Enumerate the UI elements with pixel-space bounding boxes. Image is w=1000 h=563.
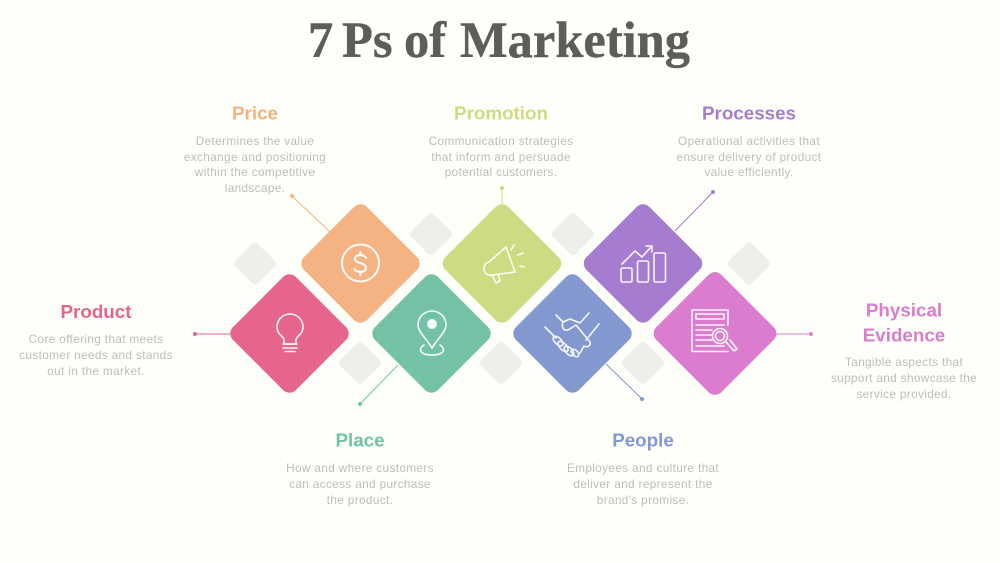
text: product: customer needs and stands <box>19 348 173 362</box>
heading: place: Place <box>335 430 385 450</box>
diamond: place <box>369 271 494 396</box>
connector: product <box>193 332 232 336</box>
decorative gray diamonds <box>232 211 772 386</box>
text: processes: value efficiently. <box>704 165 794 179</box>
diamond: product <box>227 271 352 396</box>
text: price: Determines the value <box>196 134 314 148</box>
icon: growth chart <box>621 246 666 282</box>
panel: place <box>286 271 494 507</box>
text: people: deliver and represent the <box>573 477 713 491</box>
heading: product: Product <box>61 301 132 322</box>
text: people: Employees and culture that <box>567 461 719 475</box>
panel: promotion <box>429 102 573 326</box>
connector: physical evidence <box>774 332 813 336</box>
text: physical evidence: support and showcase the <box>831 371 977 385</box>
title: Marketing <box>460 12 690 68</box>
icon: document with magnifier <box>692 310 737 352</box>
connector: processes <box>675 190 715 231</box>
text: physical evidence: service provided. <box>856 387 952 401</box>
diamond: promotion <box>439 201 565 326</box>
connector: place <box>358 365 398 406</box>
text: product: Core offering that meets <box>29 332 163 346</box>
panel: product <box>19 271 352 396</box>
panel: physical evidence <box>650 268 977 401</box>
text: price: landscape. <box>225 181 285 195</box>
title: of <box>404 12 459 68</box>
text: physical evidence: Tangible aspects that <box>845 355 963 369</box>
diamond: people <box>510 271 635 396</box>
text: processes: ensure delivery of product <box>677 150 822 164</box>
heading: price: Price <box>232 102 278 124</box>
diamond: processes <box>580 201 706 326</box>
text: promotion: potential customers. <box>445 165 557 179</box>
text: place: can access and purchase <box>289 477 431 491</box>
text: price: exchange and positioning <box>184 150 326 164</box>
icon: map pin <box>418 311 446 355</box>
connector: promotion <box>500 186 504 206</box>
panel: people <box>510 271 719 507</box>
diamond: price <box>298 201 423 326</box>
text: promotion: Communication strategies <box>429 134 573 148</box>
text: price: within the competitive <box>194 165 315 179</box>
icon: megaphone <box>484 245 524 283</box>
panel: processes <box>580 102 822 326</box>
text: product: out in the market. <box>47 364 145 378</box>
icon: light bulb <box>277 314 303 352</box>
text: promotion: that inform and persuade <box>431 150 571 164</box>
diamond: physical evidence <box>650 268 780 399</box>
panel: price <box>184 102 423 326</box>
connector: price <box>290 194 330 232</box>
icon: dollar coin <box>342 244 379 282</box>
heading: physical evidence: Physical <box>866 300 942 320</box>
icon: handshake <box>545 313 599 358</box>
heading: people: People <box>612 430 674 450</box>
text: processes: Operational activities that <box>678 134 820 148</box>
text: place: How and where customers <box>286 461 434 475</box>
heading: promotion: Promotion <box>454 102 548 124</box>
connector: people <box>606 364 644 401</box>
text: people: brand's promise. <box>597 493 689 507</box>
title: 7 <box>308 12 346 68</box>
title: Ps <box>342 12 405 68</box>
heading: physical evidence: Evidence <box>863 324 945 346</box>
heading: processes: Processes <box>702 102 796 124</box>
text: place: the product. <box>327 493 393 507</box>
